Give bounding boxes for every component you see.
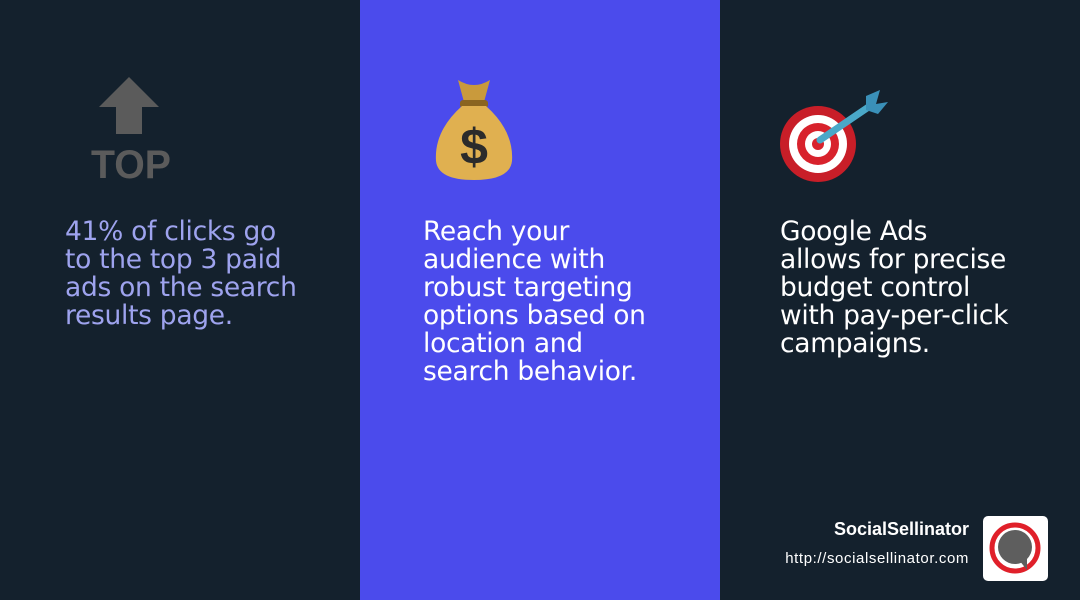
text: clicks stat: ads on the search — [65, 272, 297, 303]
text: targeting: Reach your — [423, 216, 569, 247]
brand name: SocialSellinator — [834, 519, 969, 539]
text: targeting: robust targeting — [423, 272, 633, 303]
icon: target with dart — [780, 90, 888, 182]
text: clicks stat: results page. — [65, 300, 233, 331]
text: budget: budget control — [780, 272, 970, 303]
text: budget: with pay-per-click — [780, 300, 1008, 331]
panel: left — [0, 0, 360, 600]
text: budget — [780, 216, 1008, 359]
text: targeting: options based on — [423, 300, 646, 331]
brand url: http://socialsellinator.com — [785, 550, 969, 567]
text: budget: Google Ads — [780, 216, 927, 247]
icon: money bag: $ — [460, 119, 488, 175]
text: targeting: audience with — [423, 244, 605, 275]
logo — [983, 516, 1048, 581]
text: budget: campaigns. — [780, 328, 930, 359]
text: clicks stat: 41% of clicks go — [65, 216, 276, 247]
panel: middle — [360, 0, 720, 600]
text: targeting — [423, 216, 646, 387]
text: clicks stat: to the top 3 paid — [65, 244, 281, 275]
text: targeting: location and — [423, 328, 583, 359]
brand block — [785, 516, 1048, 581]
text: targeting: search behavior. — [423, 356, 637, 387]
text: budget: allows for precise — [780, 244, 1006, 275]
icon: top arrow — [91, 77, 171, 185]
panel: right — [720, 0, 1080, 600]
text: clicks stat — [65, 216, 297, 331]
icon: money bag — [436, 80, 512, 180]
